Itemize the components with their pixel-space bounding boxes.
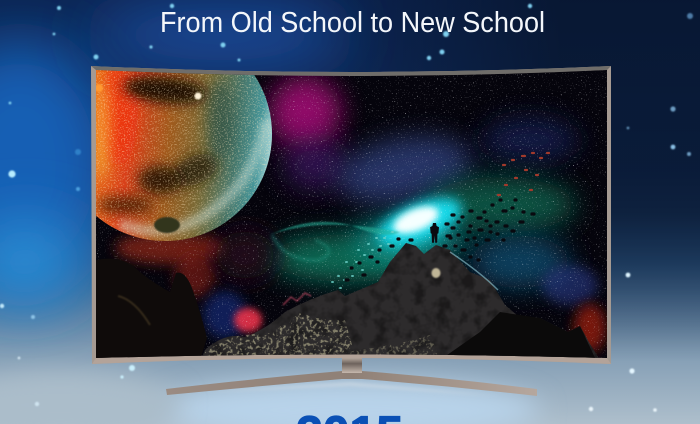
stand reflection (205, 382, 500, 396)
tv screen (96, 70, 607, 358)
star field (96, 66, 607, 358)
central mountain (200, 243, 600, 362)
drifting asteroids (346, 200, 534, 280)
stand neck (342, 356, 362, 373)
stand base (166, 371, 537, 396)
curved tv frame (91, 66, 611, 364)
left mountain (96, 259, 207, 358)
silhouette figure on the peak (430, 223, 439, 243)
pink flare strands (283, 293, 311, 305)
planet (96, 70, 272, 241)
title: From Old School to New School (160, 7, 545, 39)
tv stand (166, 356, 537, 396)
teal dust band (332, 232, 393, 288)
galaxy glow (115, 76, 606, 352)
